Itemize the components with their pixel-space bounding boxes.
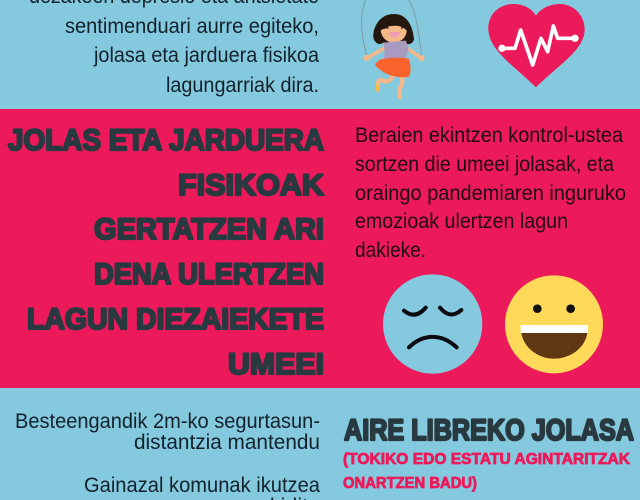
text block: bottom safety rules (15, 410, 320, 500)
heading: middle section (8, 124, 324, 381)
text block: bottom safety rules: Gainazal komunak ikutzea (84, 474, 320, 497)
text block: bottom safety rules: Besteengandik 2m-ko segurtasun- (15, 410, 320, 433)
icon: sad face (383, 274, 482, 374)
text block: bottom safety rules: distantzia mantendu (134, 431, 320, 454)
heading: middle section: JOLAS ETA JARDUERA (8, 124, 324, 157)
text block: middle explanation: Beraien ekintzen kontrol-ustea (355, 124, 623, 147)
panel: top section background (0, 0, 640, 109)
text block: top intro: sentimenduari aurre egiteko, (65, 15, 319, 38)
text block: top intro: jolasa eta jarduera fisikoa (93, 44, 319, 67)
text block: outdoor play condition: (TOKIKO EDO ESTATU AGINTARITZAK (343, 451, 631, 468)
heading: middle section: UMEEI (228, 348, 324, 381)
icon: happy face (505, 275, 603, 373)
heading: middle section: DENA ULERTZEN (94, 258, 324, 291)
text block: middle explanation: dakieke. (355, 239, 426, 262)
icon: heart with pulse line (488, 4, 585, 87)
text block: outdoor play condition (343, 451, 631, 492)
text block: top intro (29, 0, 319, 97)
panel: pink middle section (0, 109, 640, 388)
heading: middle section: GERTATZEN ARI (94, 213, 324, 246)
text block: middle explanation: oraingo pandemiaren inguruko (355, 182, 626, 205)
heading: middle section: FISIKOAK (178, 169, 324, 202)
text block: top intro: lagungarriak dira. (166, 74, 319, 97)
text block: middle explanation (355, 124, 626, 262)
text block: outdoor play condition: ONARTZEN BADU) (343, 475, 477, 492)
icon: girl jumping rope (362, 0, 425, 97)
text block: middle explanation: emozioak ulertzen lagun (355, 210, 568, 233)
heading: middle section: LAGUN DIEZAIEKETE (27, 303, 324, 336)
text block: middle explanation: sortzen die umeei jolasak, eta (355, 153, 614, 176)
